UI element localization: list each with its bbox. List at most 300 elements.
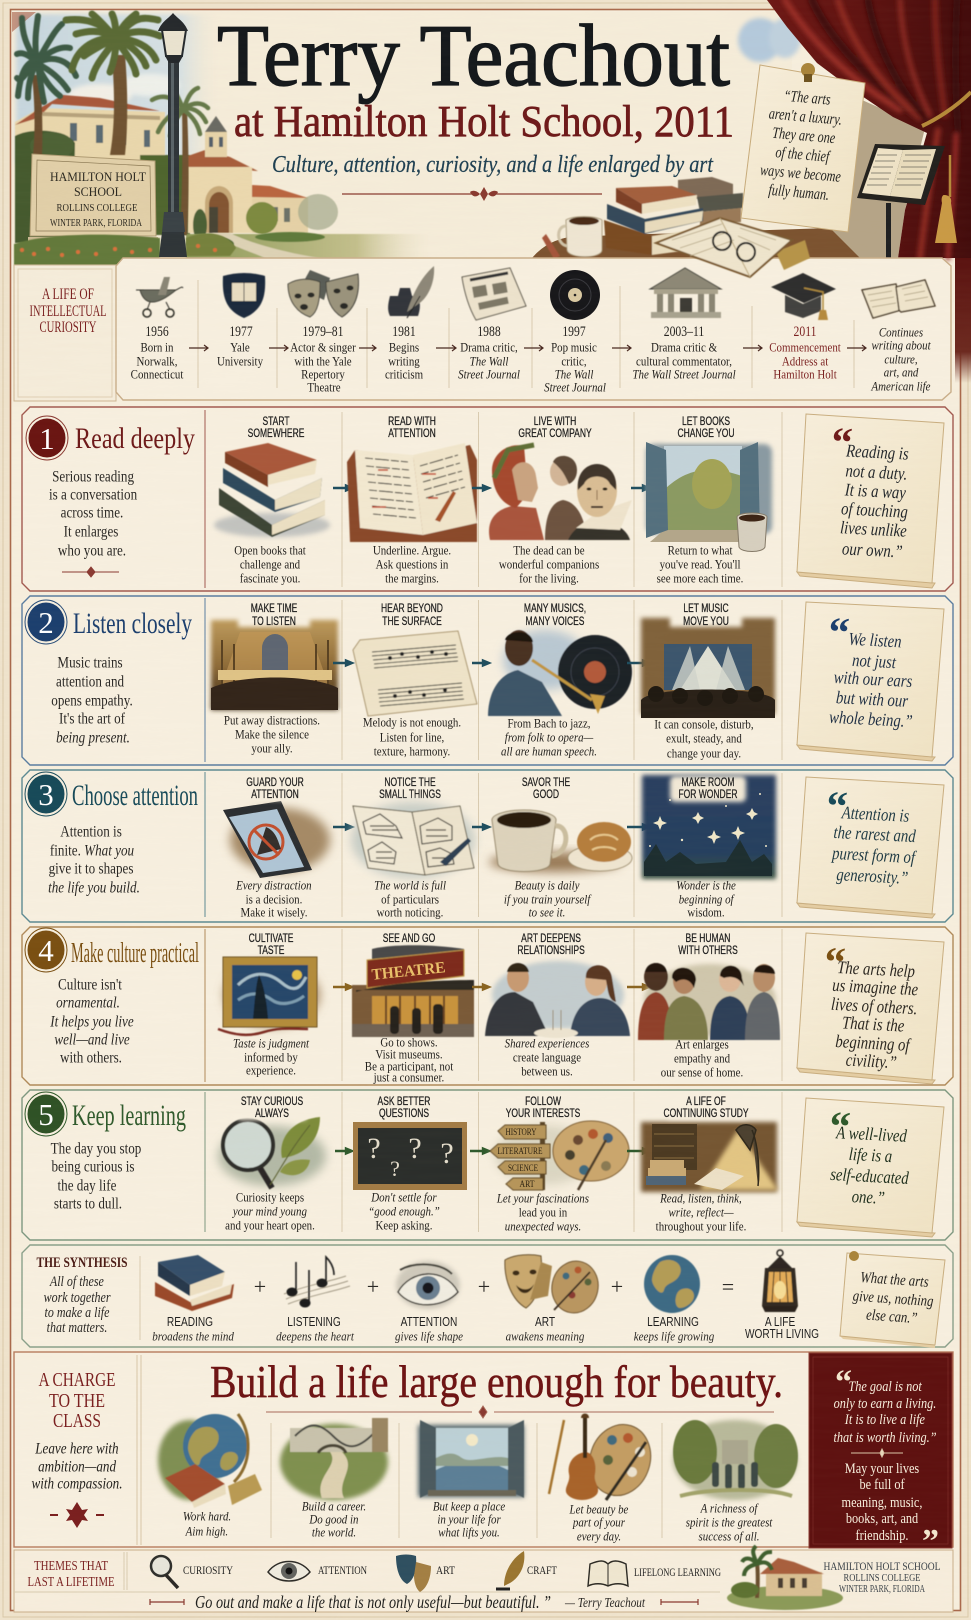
- theme: curiosity: [151, 1556, 233, 1588]
- timeline entry: continues writing: American life: [871, 378, 931, 394]
- step: work hard: Aim high.: [185, 1523, 228, 1539]
- step: start somewhere: START: [262, 416, 290, 428]
- number badge: [26, 416, 68, 460]
- quote card: us imagine the: [832, 974, 919, 1000]
- icon: starry night: [642, 775, 776, 879]
- icon: silenced phone: [223, 801, 330, 878]
- step: read with attention: READ WITH: [388, 416, 436, 428]
- step: art deepens relationships: ART DEEPENS: [521, 933, 581, 945]
- footer label: LAST A LIFETIME: [28, 1575, 114, 1590]
- step: live with great company: [489, 416, 632, 586]
- arrow: [627, 824, 649, 830]
- charge intro: ambition—and: [38, 1458, 117, 1476]
- step: savor the good: GOOD: [533, 789, 559, 801]
- step: live with great company: The dead can be: [513, 542, 585, 558]
- synthesis heading: THE SYNTHESIS: [36, 1255, 128, 1271]
- intro text: [51, 1140, 141, 1213]
- panel: 5 Keep learning: [22, 1090, 953, 1240]
- quote panel: red: meaning, music,: [842, 1494, 922, 1510]
- step: hear beyond the surface: [353, 603, 477, 759]
- ornament: [342, 187, 602, 201]
- step: ask better questions: “good enough.”: [368, 1203, 440, 1219]
- arrow: [333, 824, 352, 830]
- charge label: [38, 1369, 116, 1432]
- icon: chalkboard: [353, 1122, 467, 1190]
- number badge: 1: [39, 421, 55, 456]
- arrow: [333, 660, 352, 666]
- intro text: [49, 468, 138, 560]
- step: build a career: the world.: [312, 1524, 356, 1540]
- quote card: civility.”: [845, 1049, 897, 1073]
- step: see and go: [352, 933, 474, 1085]
- intro text: the day life: [57, 1177, 117, 1195]
- quote card: one.”: [851, 1186, 885, 1208]
- icon: open book: [862, 280, 935, 318]
- step: ask better questions: ASK BETTER: [378, 1096, 430, 1108]
- step: let books change you: you've read. You'll: [660, 556, 741, 572]
- step: follow your interests: FOLLOW: [525, 1096, 561, 1108]
- quote panel: red: only to earn a living.: [834, 1395, 936, 1411]
- step: stay curious always: Curiosity keeps: [236, 1189, 304, 1205]
- pinned note: [840, 1251, 945, 1348]
- intro text: Music trains: [57, 654, 123, 672]
- icon: concert hall: [211, 620, 338, 710]
- theme: lifelong learning: [588, 1561, 721, 1586]
- charge intro: with compassion.: [31, 1475, 123, 1493]
- item: listening: deepens the heart: [276, 1328, 355, 1344]
- step: cultivate taste: informed by: [244, 1049, 298, 1065]
- step: see and go: THEATRE: [371, 959, 446, 984]
- step: many musics, many voices: MANY MUSICS,: [524, 603, 586, 615]
- step: make room for wonder: MAKE ROOM: [682, 777, 734, 789]
- timeline label panel: CURIOSITY: [40, 319, 97, 336]
- footer school name: ROLLINS COLLEGE: [844, 1572, 921, 1584]
- quote panel: red: friendship.: [856, 1527, 908, 1543]
- sign: Hamilton Holt School: HAMILTON HOLT: [50, 169, 146, 184]
- number badge: [25, 772, 67, 816]
- intro text: who you are.: [58, 542, 126, 560]
- step: notice the small things: worth noticing.: [377, 904, 443, 920]
- number badge: 2: [38, 605, 54, 640]
- quote panel: red: ”: [922, 1523, 939, 1560]
- step: see and go: just a consumer.: [373, 1069, 444, 1085]
- timeline entry: 1977: Yale: [230, 339, 250, 355]
- intro text: with others.: [60, 1049, 122, 1067]
- step: keep a place: [418, 1420, 524, 1540]
- quote card: [797, 777, 944, 918]
- timeline entry: 1981: [385, 323, 424, 382]
- icon: inkwell and quill: [388, 266, 434, 318]
- theme: craft: [496, 1551, 558, 1589]
- step: make room for wonder: beginning of: [679, 891, 735, 907]
- step: cultivate taste: Taste is judgment: [233, 1035, 310, 1051]
- quote card: A well-lived: [835, 1122, 908, 1146]
- arrow: [472, 984, 489, 990]
- quote card: “: [827, 610, 851, 657]
- quote card: Reading is: [845, 440, 909, 464]
- sign: Hamilton Holt School: ROLLINS COLLEGE: [56, 203, 138, 214]
- step: live with great company: wonderful companions: [499, 556, 599, 572]
- quote card: “: [828, 1104, 852, 1151]
- icon: four friends: [638, 963, 780, 1040]
- timeline panel: [116, 258, 951, 400]
- item: learning: LEARNING: [647, 1315, 699, 1329]
- step: follow your interests: LITERATURE: [498, 1146, 543, 1156]
- quote card: but with our: [836, 687, 909, 711]
- item: reading: broadens the mind: [152, 1328, 235, 1344]
- quote panel: red: books, art, and: [846, 1510, 918, 1526]
- quote card: [797, 1098, 944, 1237]
- panel: 2 Listen closely: [22, 596, 953, 765]
- step: guard your attention: ATTENTION: [251, 789, 299, 801]
- arrow: [333, 486, 352, 490]
- timeline entry: 1956: [131, 323, 184, 382]
- step: start somewhere: [214, 416, 330, 586]
- icon: Yale shield: [223, 273, 265, 318]
- step: savor the good: to see it.: [529, 904, 565, 920]
- arrow: [470, 1148, 489, 1154]
- icon: vinyl record: [550, 270, 600, 320]
- charge label: A CHARGE: [38, 1369, 116, 1391]
- icon: annotated book: [347, 443, 477, 542]
- palm trees: [17, 14, 208, 235]
- item: attention: gives life shape: [395, 1328, 464, 1344]
- step: hear beyond the surface: Melody is not enough.: [363, 714, 461, 730]
- step: stay curious always: ALWAYS: [255, 1108, 289, 1120]
- step: many musics, many voices: From Bach to jazz,: [507, 715, 591, 731]
- quote card: We listen: [848, 628, 902, 652]
- intro text: finite. What you: [50, 842, 134, 860]
- step: art deepens relationships: RELATIONSHIPS: [517, 945, 585, 957]
- quote card: not a duty.: [845, 460, 908, 484]
- step: follow your interests: HISTORY: [506, 1127, 537, 1137]
- step: guard your attention: is a decision.: [246, 891, 302, 907]
- timeline entry: 1997: The Wall: [555, 366, 594, 382]
- wall behind note: [825, 100, 925, 258]
- timeline entry: 1956: 1956: [145, 323, 169, 339]
- icon: signpost and palette: [490, 1121, 629, 1190]
- timeline entry: 2003–11: 2003–11: [664, 323, 704, 339]
- step: many musics, many voices: [488, 603, 632, 759]
- step: follow your interests: ART: [520, 1179, 535, 1189]
- quote card: self-educated: [830, 1164, 910, 1188]
- step: let books change you: CHANGE YOU: [677, 428, 735, 440]
- intro text: Culture isn't: [58, 976, 122, 994]
- step: work hard: Work hard.: [183, 1508, 231, 1524]
- timeline label panel: A LIFE OF: [42, 286, 94, 303]
- step: read with attention: [347, 416, 477, 586]
- step: guard your attention: GUARD YOUR: [246, 777, 304, 789]
- step: make room for wonder: FOR WONDER: [678, 789, 738, 801]
- open book with glasses: [656, 218, 810, 277]
- step: hear beyond the surface: THE SURFACE: [382, 616, 442, 628]
- step: read with attention: ATTENTION: [388, 428, 436, 440]
- quote card: our own.”: [842, 538, 903, 562]
- step: a life of continuing study: Read, listen, think,: [659, 1190, 742, 1206]
- quote card: “: [825, 783, 849, 831]
- heading: Listen closely: [73, 607, 192, 640]
- step: guard your attention: Every distraction: [235, 877, 312, 893]
- footer quote: — Terry Teachout: [564, 1596, 646, 1611]
- step: be human with others: empathy and: [674, 1050, 730, 1066]
- step: ask better questions: QUESTIONS: [379, 1108, 429, 1120]
- plus: +: [611, 1274, 623, 1299]
- item: attention: [395, 1261, 464, 1344]
- charge label: TO THE: [49, 1390, 105, 1412]
- theme: art: [396, 1554, 456, 1592]
- timeline entry: 1979–81: Repertory: [301, 366, 345, 382]
- pinned note: of the chief: [775, 144, 832, 166]
- synthesis intro: work together: [44, 1289, 111, 1305]
- main headline: Build a life large enough for beauty.: [210, 1356, 783, 1407]
- step: let books change you: see more each time.: [657, 570, 743, 586]
- step: stay curious always: your mind young: [232, 1203, 307, 1219]
- step: many musics, many voices: all are human speech.: [501, 743, 597, 759]
- ornament: [50, 1502, 104, 1528]
- timeline entry: 2003–11: Drama critic &: [651, 339, 718, 355]
- pinned note: [741, 63, 865, 232]
- timeline arrows: [189, 345, 866, 351]
- step: live with great company: for the living.: [519, 570, 579, 586]
- step: see and go: Be a participant, not: [365, 1058, 454, 1074]
- icon: chalkboard: ?: [390, 1156, 400, 1181]
- pinned note: fully human.: [768, 181, 830, 204]
- charge intro: Leave here with: [34, 1440, 119, 1458]
- intro text: across time.: [61, 504, 123, 522]
- footer school name: [824, 1559, 940, 1595]
- quote card: beginning of: [835, 1031, 912, 1055]
- footer school name: WINTER PARK, FLORIDA: [839, 1583, 925, 1595]
- step: notice the small things: SMALL THINGS: [379, 789, 441, 801]
- intro text: ornamental.: [56, 994, 120, 1012]
- item: attention: ATTENTION: [401, 1315, 457, 1329]
- timeline entry: 1997: critic,: [561, 353, 587, 369]
- step: see and go: Go to shows.: [380, 1034, 438, 1050]
- step: be human with others: WITH OTHERS: [678, 945, 738, 957]
- charge intro: [31, 1440, 123, 1493]
- icon: baby carriage: [136, 277, 183, 317]
- step: savor the good: [489, 777, 632, 920]
- step: follow your interests: [490, 1096, 629, 1234]
- timeline entry: 2011: [769, 323, 841, 382]
- step: make room for wonder: [642, 775, 776, 920]
- timeline entry: 1956: Born in: [140, 339, 174, 355]
- charge label: CLASS: [53, 1410, 101, 1432]
- number badge: 4: [38, 933, 54, 968]
- quote card: That is the: [842, 1012, 905, 1036]
- icon: sketchbook: [351, 802, 475, 878]
- icon: trumpet player and record: [488, 630, 632, 716]
- timeline entry: 1997: [544, 323, 607, 395]
- headline rule: [266, 1406, 774, 1418]
- footer panel: themes: [14, 1546, 953, 1612]
- step: make time to listen: your ally.: [251, 740, 293, 756]
- quote card: generosity.”: [836, 864, 909, 888]
- plus: +: [367, 1274, 379, 1299]
- timeline entry: 1988: Drama critic,: [460, 339, 518, 355]
- lamp post: [158, 13, 188, 257]
- footer label: [28, 1559, 114, 1590]
- quote panel: red: “: [835, 1364, 852, 1401]
- timeline entry: 1981: Begins: [389, 339, 419, 355]
- pinned note: “The arts: [783, 87, 832, 109]
- book stack: [604, 177, 743, 255]
- step: let beauty be part: every day.: [577, 1528, 621, 1544]
- timeline entry: 1988: The Wall: [470, 353, 509, 369]
- step: live with great company: LIVE WITH: [534, 416, 576, 428]
- timeline entry: 1979–81: Theatre: [307, 379, 341, 395]
- icon: theatre: [352, 945, 474, 1037]
- step: a life of continuing study: throughout your life.: [656, 1218, 746, 1234]
- theme: attention: [268, 1562, 367, 1581]
- icon: framed starry painting: [218, 957, 320, 1035]
- step: follow your interests: lead you in: [519, 1204, 567, 1220]
- footer label: THEMES THAT: [34, 1559, 108, 1574]
- step: ask better questions: Keep asking.: [376, 1217, 432, 1233]
- curtain: [767, 0, 971, 383]
- intro text: Attention is: [60, 823, 122, 841]
- quote panel: red: [809, 1353, 952, 1560]
- step: richness of spirit: A richness of: [700, 1500, 759, 1516]
- lawn and path: [186, 232, 430, 258]
- intro text: attention and: [56, 673, 125, 691]
- step: ask better questions: [353, 1096, 467, 1233]
- item: reading: READING: [167, 1315, 213, 1329]
- timeline entry: 2011: 2011: [794, 323, 816, 339]
- icon: bridge and path: [280, 1418, 388, 1500]
- step: art deepens relationships: Shared experiences: [505, 1035, 590, 1051]
- step: notice the small things: [351, 777, 475, 920]
- timeline entry: 1988: 1988: [477, 323, 501, 339]
- step: read with attention: Underline. Argue.: [373, 542, 451, 558]
- quote card: It is a way: [844, 479, 907, 503]
- arrow: [627, 660, 649, 666]
- intro text: It helps you live: [49, 1013, 134, 1031]
- intro text: starts to dull.: [54, 1195, 122, 1213]
- step: notice the small things: of particulars: [381, 891, 439, 907]
- step: let beauty be part: Let beauty be: [569, 1501, 629, 1517]
- step: art deepens relationships: [485, 933, 630, 1079]
- quote card: [797, 933, 944, 1084]
- quote card: the rarest and: [833, 821, 917, 847]
- step: make room for wonder: Wonder is the: [676, 877, 736, 893]
- timeline entry: 2003–11: cultural commentator,: [636, 353, 732, 369]
- quote card: [797, 414, 944, 588]
- number badge: [25, 1092, 67, 1136]
- icon: stacked books: [214, 443, 330, 537]
- intro text: being curious is: [51, 1158, 135, 1176]
- timeline entry: continues writing: Continues: [879, 324, 923, 340]
- number badge: 5: [38, 1097, 54, 1132]
- pinned note: aren't a luxury.: [768, 105, 843, 129]
- curtain tieback: [922, 92, 971, 126]
- item: a life worth living: A LIFE: [765, 1315, 795, 1329]
- timeline entry: 1977: [217, 323, 263, 369]
- synthesis intro: to make a life: [45, 1304, 109, 1320]
- intro text: [48, 823, 140, 897]
- intro text: well—and live: [54, 1031, 130, 1049]
- step: a life of continuing study: A LIFE OF: [686, 1096, 726, 1108]
- step: start somewhere: fascinate you.: [240, 570, 300, 586]
- panel: 1 Read deeply: [22, 407, 953, 591]
- intro text: It's the art of: [59, 710, 125, 728]
- step: cultivate taste: experience.: [246, 1062, 296, 1078]
- step: build a career: Do good in: [308, 1511, 358, 1527]
- timeline label panel: [14, 265, 116, 401]
- timeline entry: 2003–11: The Wall Street Journal: [632, 366, 736, 382]
- icon: graduation cap: [771, 273, 836, 320]
- step: make room for wonder: wisdom.: [687, 904, 725, 920]
- quote card: [797, 602, 944, 761]
- step: read with attention: the margins.: [385, 570, 439, 586]
- quote card: “: [823, 939, 847, 986]
- quote card: “: [830, 420, 854, 467]
- timeline entry: 1979–81: 1979–81: [303, 323, 343, 339]
- step: let books change you: Return to what: [668, 542, 733, 558]
- item: a life worth living: [745, 1250, 819, 1341]
- step: be human with others: [638, 933, 780, 1080]
- step: see and go: Visit museums.: [375, 1046, 443, 1062]
- step: follow your interests: SCIENCE: [508, 1163, 538, 1173]
- icon: graduates on a path: [673, 1420, 798, 1500]
- quote card: lives of others.: [831, 993, 918, 1019]
- intro text: [49, 976, 134, 1067]
- hero scene: [12, 0, 971, 383]
- step: a life of continuing study: CONTINUING STUDY: [664, 1108, 749, 1120]
- timeline entry: continues writing: art, and: [884, 364, 919, 380]
- step: be human with others: our sense of home.: [661, 1064, 743, 1080]
- step: follow your interests: Let your fascinations: [496, 1190, 589, 1206]
- tassel: [935, 195, 957, 243]
- step: live with great company: GREAT COMPANY: [518, 428, 592, 440]
- step: many musics, many voices: from folk to opera—: [505, 729, 594, 745]
- theme: attention: ATTENTION: [318, 1563, 367, 1577]
- intro text: the life you build.: [48, 879, 140, 897]
- quote card: of touching: [841, 498, 908, 522]
- icon: concert stage: [641, 618, 775, 718]
- quote panel: red: that is worth living.”: [833, 1429, 937, 1445]
- step: guard your attention: [223, 777, 330, 920]
- arrow: [627, 984, 649, 990]
- timeline entry: 1981: 1981: [392, 323, 416, 339]
- subtitle: school and year: at Hamilton Holt School, 2011: [234, 97, 734, 146]
- item: art: awakens meaning: [506, 1328, 584, 1344]
- step: make time to listen: MAKE TIME: [251, 603, 298, 615]
- step: let music move you: LET MUSIC: [683, 603, 729, 615]
- step: make time to listen: TO LISTEN: [252, 616, 296, 628]
- sky wash: [16, 14, 801, 164]
- quote card: life is a: [848, 1144, 893, 1167]
- step: build a career: [280, 1418, 388, 1540]
- step: stay curious always: and your heart open.: [225, 1217, 315, 1233]
- timeline entry: 2003–11: [632, 323, 736, 382]
- step: cultivate taste: CULTIVATE: [249, 933, 294, 945]
- icon: chalkboard: ?: [440, 1137, 454, 1170]
- intro text: give it to shapes: [49, 860, 134, 878]
- step: keep a place: in your life for: [437, 1511, 501, 1527]
- step: hear beyond the surface: Listen for line,: [380, 729, 444, 745]
- icon: chalkboard: ?: [367, 1132, 381, 1165]
- coffee mug: [542, 217, 602, 259]
- corner ornament: [12, 12, 36, 32]
- ornament: [62, 567, 119, 577]
- step: let music move you: change your day.: [667, 745, 741, 761]
- step: let books change you: LET BOOKS: [682, 416, 730, 428]
- timeline entry: continues writing: writing about: [871, 337, 931, 353]
- quote panel: red: The goal is not: [848, 1378, 923, 1394]
- icon: chalkboard: ?: [408, 1132, 422, 1165]
- arrow: [472, 824, 489, 830]
